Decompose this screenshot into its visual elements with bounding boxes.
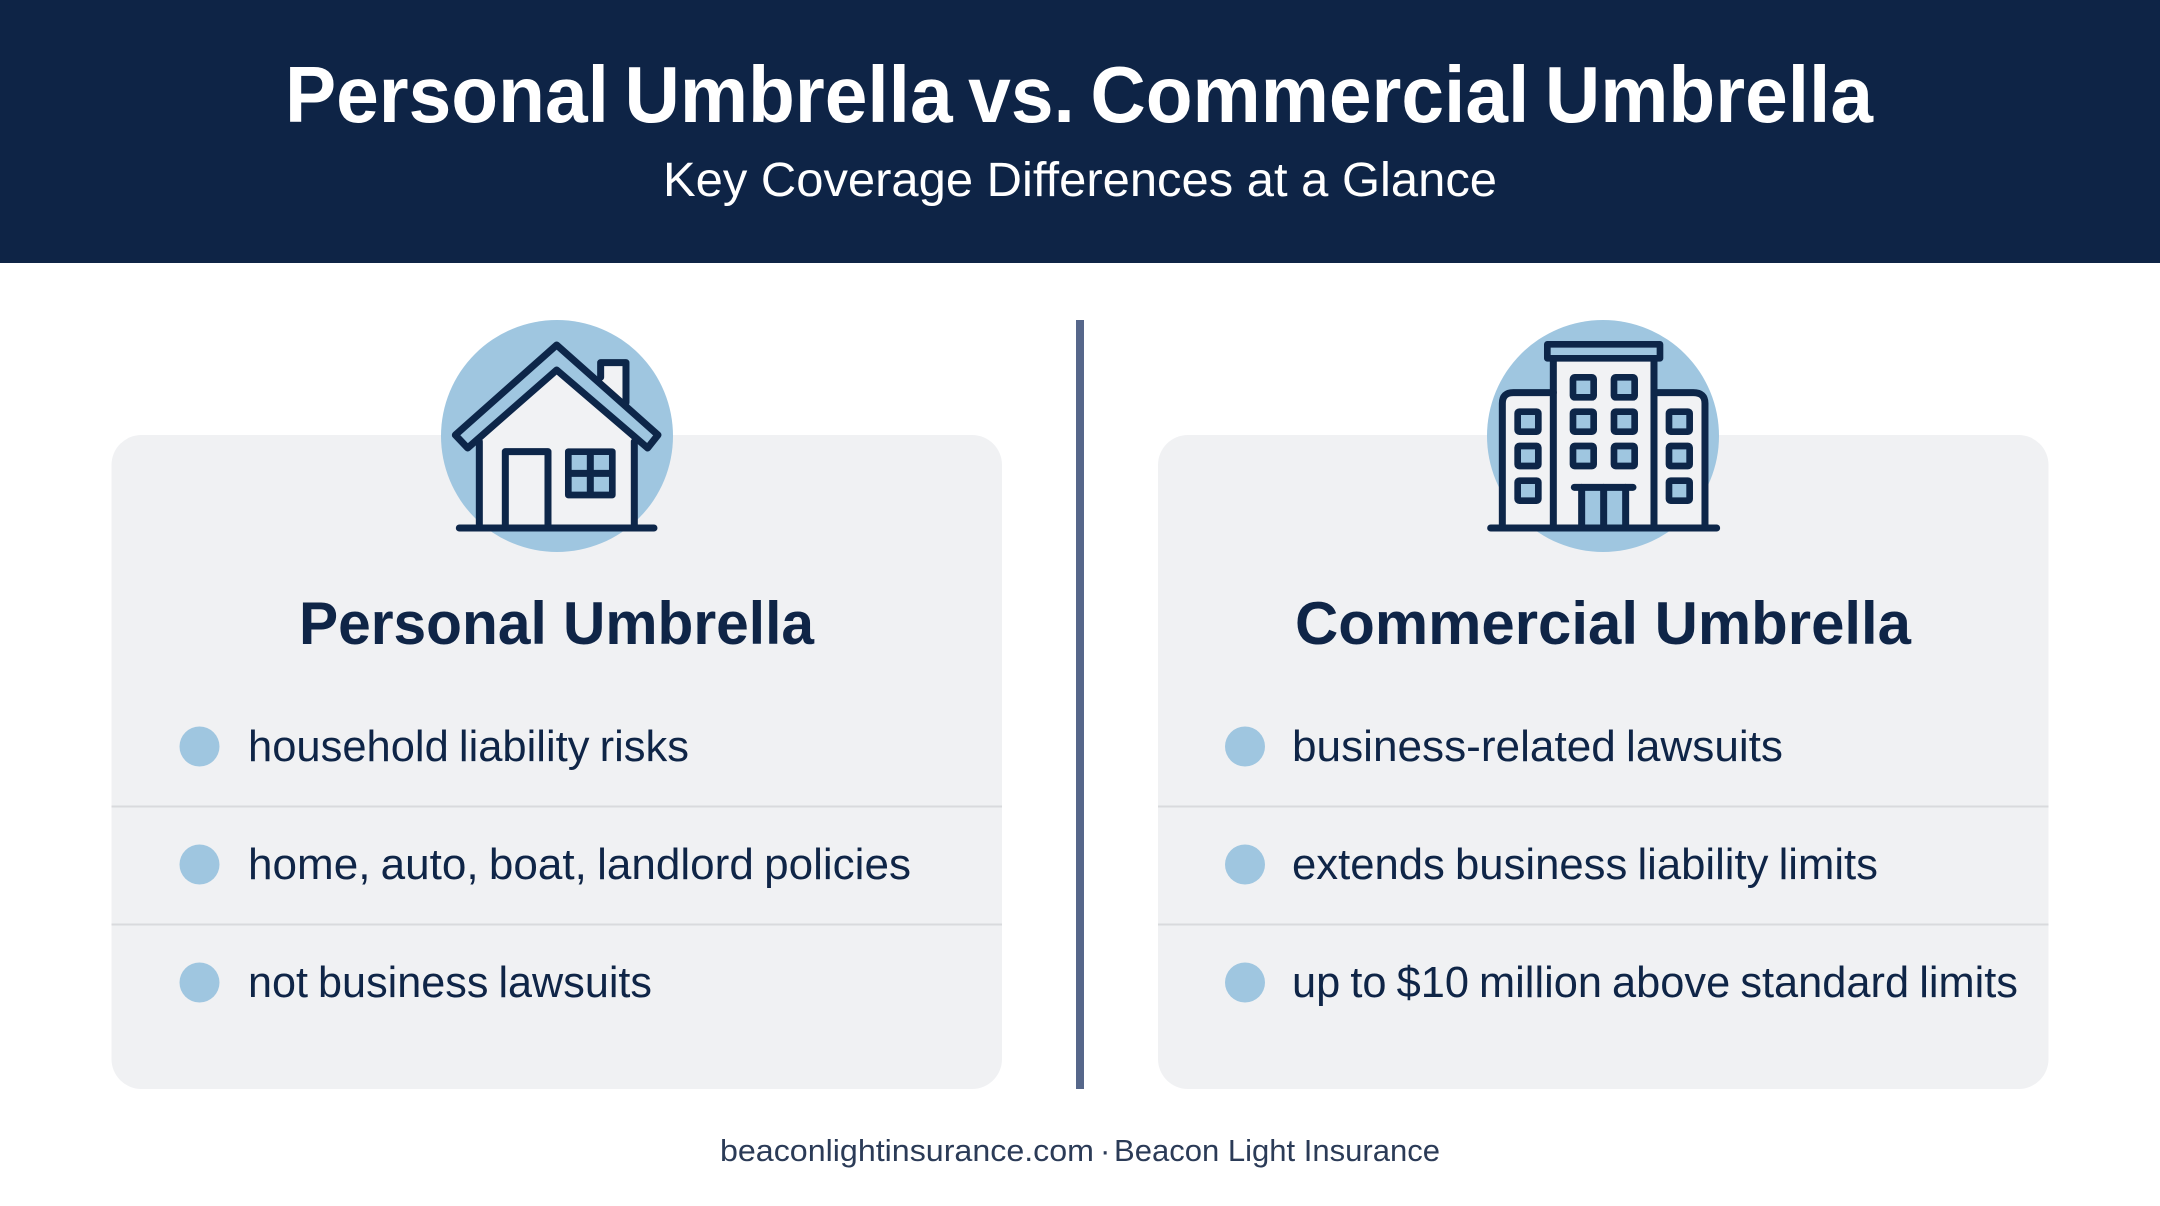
subtitle: Key Coverage Differences at a Glance: [663, 154, 1497, 207]
icon: office building: [1487, 320, 1719, 552]
row dividers: [1158, 806, 2048, 924]
icon: house: [441, 320, 673, 552]
footer: Beacon Light Insurance: [1114, 1133, 1440, 1168]
panel heading: Personal Umbrella: [299, 590, 815, 657]
list item 3: not business lawsuits: [248, 958, 652, 1007]
list item 2: home, auto, boat, landlord policies: [248, 840, 911, 889]
list item 1: business-related lawsuits: [1292, 722, 1783, 771]
footer: [720, 1133, 1440, 1168]
list item 3: up to $10 million above standard limits: [1292, 958, 2018, 1007]
center divider: [1076, 320, 1084, 1089]
list item 1: household liability risks: [248, 722, 689, 771]
footer: beaconlightinsurance.com: [720, 1133, 1094, 1168]
footer: ·: [1100, 1133, 1110, 1168]
row dividers: [112, 806, 1002, 924]
panel: commercial umbrella: [1158, 320, 2048, 1089]
panel: personal umbrella: [112, 320, 1002, 1089]
header banner: [0, 0, 2160, 263]
panel heading: Commercial Umbrella: [1295, 590, 1912, 657]
list item 2: extends business liability limits: [1292, 840, 1878, 889]
title: Personal Umbrella vs. Commercial Umbrella: [285, 50, 1873, 139]
